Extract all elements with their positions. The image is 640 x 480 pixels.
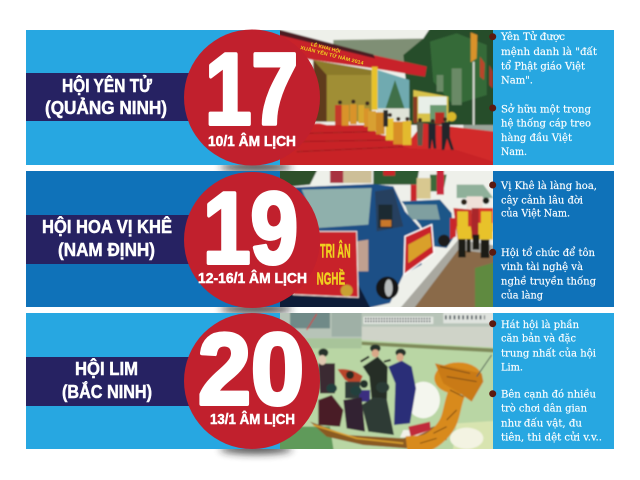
banner slogan — [317, 240, 350, 285]
description 2: của Việt Nam. — [501, 209, 570, 220]
festival name 3: (BẮC NINH) — [62, 381, 152, 402]
description 3: tiên, thi dệt cửi v.v.. — [501, 432, 602, 443]
lunar date 2: 12-16/1 ÂM LỊCH — [198, 269, 307, 287]
side panel background 1 — [493, 30, 614, 165]
side panel background 3 — [493, 313, 614, 449]
singers — [362, 356, 389, 400]
monks — [335, 104, 411, 145]
title band 1 — [26, 73, 196, 121]
festival name 1: HỘI YÊN TỬ — [62, 75, 152, 96]
side panel background 2 — [493, 171, 614, 307]
banner slogan: NGHỀ — [317, 268, 345, 289]
photo: quan họ boat singers — [280, 313, 493, 449]
date number 17: 17 — [205, 34, 298, 146]
festival name 1 — [45, 75, 167, 118]
roof banner text: LỄ KHAI HỘI — [310, 40, 342, 55]
panel: Hội Yên Tử — [26, 30, 614, 166]
photo: flower trucks — [280, 171, 493, 307]
festival name 1: (QUẢNG NINH) — [45, 97, 167, 118]
lunar date 3: 13/1 ÂM LỊCH — [210, 410, 295, 428]
description 1: Nam. — [501, 147, 527, 158]
description 1 — [489, 32, 597, 158]
circle 2 — [184, 172, 320, 308]
title band 2 — [26, 215, 196, 264]
circle drop shadows — [220, 162, 292, 454]
description 2: của làng — [501, 290, 544, 301]
description 3 — [489, 319, 602, 443]
procession — [467, 196, 483, 210]
description 3: căn bản và đặc — [501, 333, 576, 344]
panel: Hội hoa Vị Khê — [26, 171, 614, 308]
description 1: mệnh danh là "đất — [501, 47, 597, 58]
first truck — [294, 183, 422, 307]
description 3: như đấu vật, đu — [501, 418, 583, 429]
panel background 1 — [26, 30, 286, 165]
description 1: tổ Phật giáo Việt — [501, 60, 585, 72]
description 3: Hát hội là phần — [501, 319, 580, 331]
description 2: cây cảnh lâu đời — [501, 195, 583, 206]
description 3: trung nhất của hội — [501, 348, 596, 359]
seated singers — [337, 368, 364, 383]
description 1: Sở hữu một trong — [501, 104, 592, 115]
festival name 3: HỘI LIM — [75, 358, 138, 379]
description 2: Hội tổ chức để tôn — [501, 247, 596, 259]
description 1: Nam". — [501, 75, 533, 86]
description 2: nghề truyền thống — [501, 275, 597, 287]
festival name 3 — [62, 358, 152, 402]
description 3: Lim. — [501, 362, 523, 373]
description 1: hệ thống cáp treo — [501, 119, 591, 130]
title band 3 — [26, 357, 196, 406]
description 2 — [489, 181, 597, 301]
festival name 2 — [42, 216, 172, 260]
description 1: hàng đầu Việt — [501, 132, 572, 144]
festival name 2: HỘI HOA VỊ KHÊ — [42, 216, 172, 237]
circle 3 — [184, 313, 320, 449]
circle 1 — [184, 30, 320, 166]
date number 19: 19 — [203, 173, 298, 285]
boat hull — [310, 422, 450, 448]
photo: temple ceremony — [280, 30, 493, 165]
lunar date 1: 10/1 ÂM LỊCH — [208, 132, 296, 150]
festival name 2: (NAM ĐỊNH) — [58, 240, 155, 260]
roof banner text: XUÂN YÊN TỬ NĂM 2014 — [300, 43, 365, 67]
date number 20: 20 — [198, 314, 304, 426]
description 1: Yên Tử được — [500, 32, 565, 43]
description 3: Bên cạnh đó nhiều — [501, 388, 597, 400]
dragon — [407, 393, 457, 445]
panel: Hội Lim — [26, 313, 614, 449]
second truck — [402, 200, 453, 248]
description 3: trò chơi dân gian — [501, 403, 588, 414]
panel background 2 — [26, 171, 286, 307]
description 2: Vị Khê là làng hoa, — [500, 181, 597, 192]
photo: flower trucks: TRI ÂN — [320, 238, 351, 262]
description 2: vinh tài nghệ và — [500, 262, 583, 273]
panel background 3 — [26, 313, 286, 449]
